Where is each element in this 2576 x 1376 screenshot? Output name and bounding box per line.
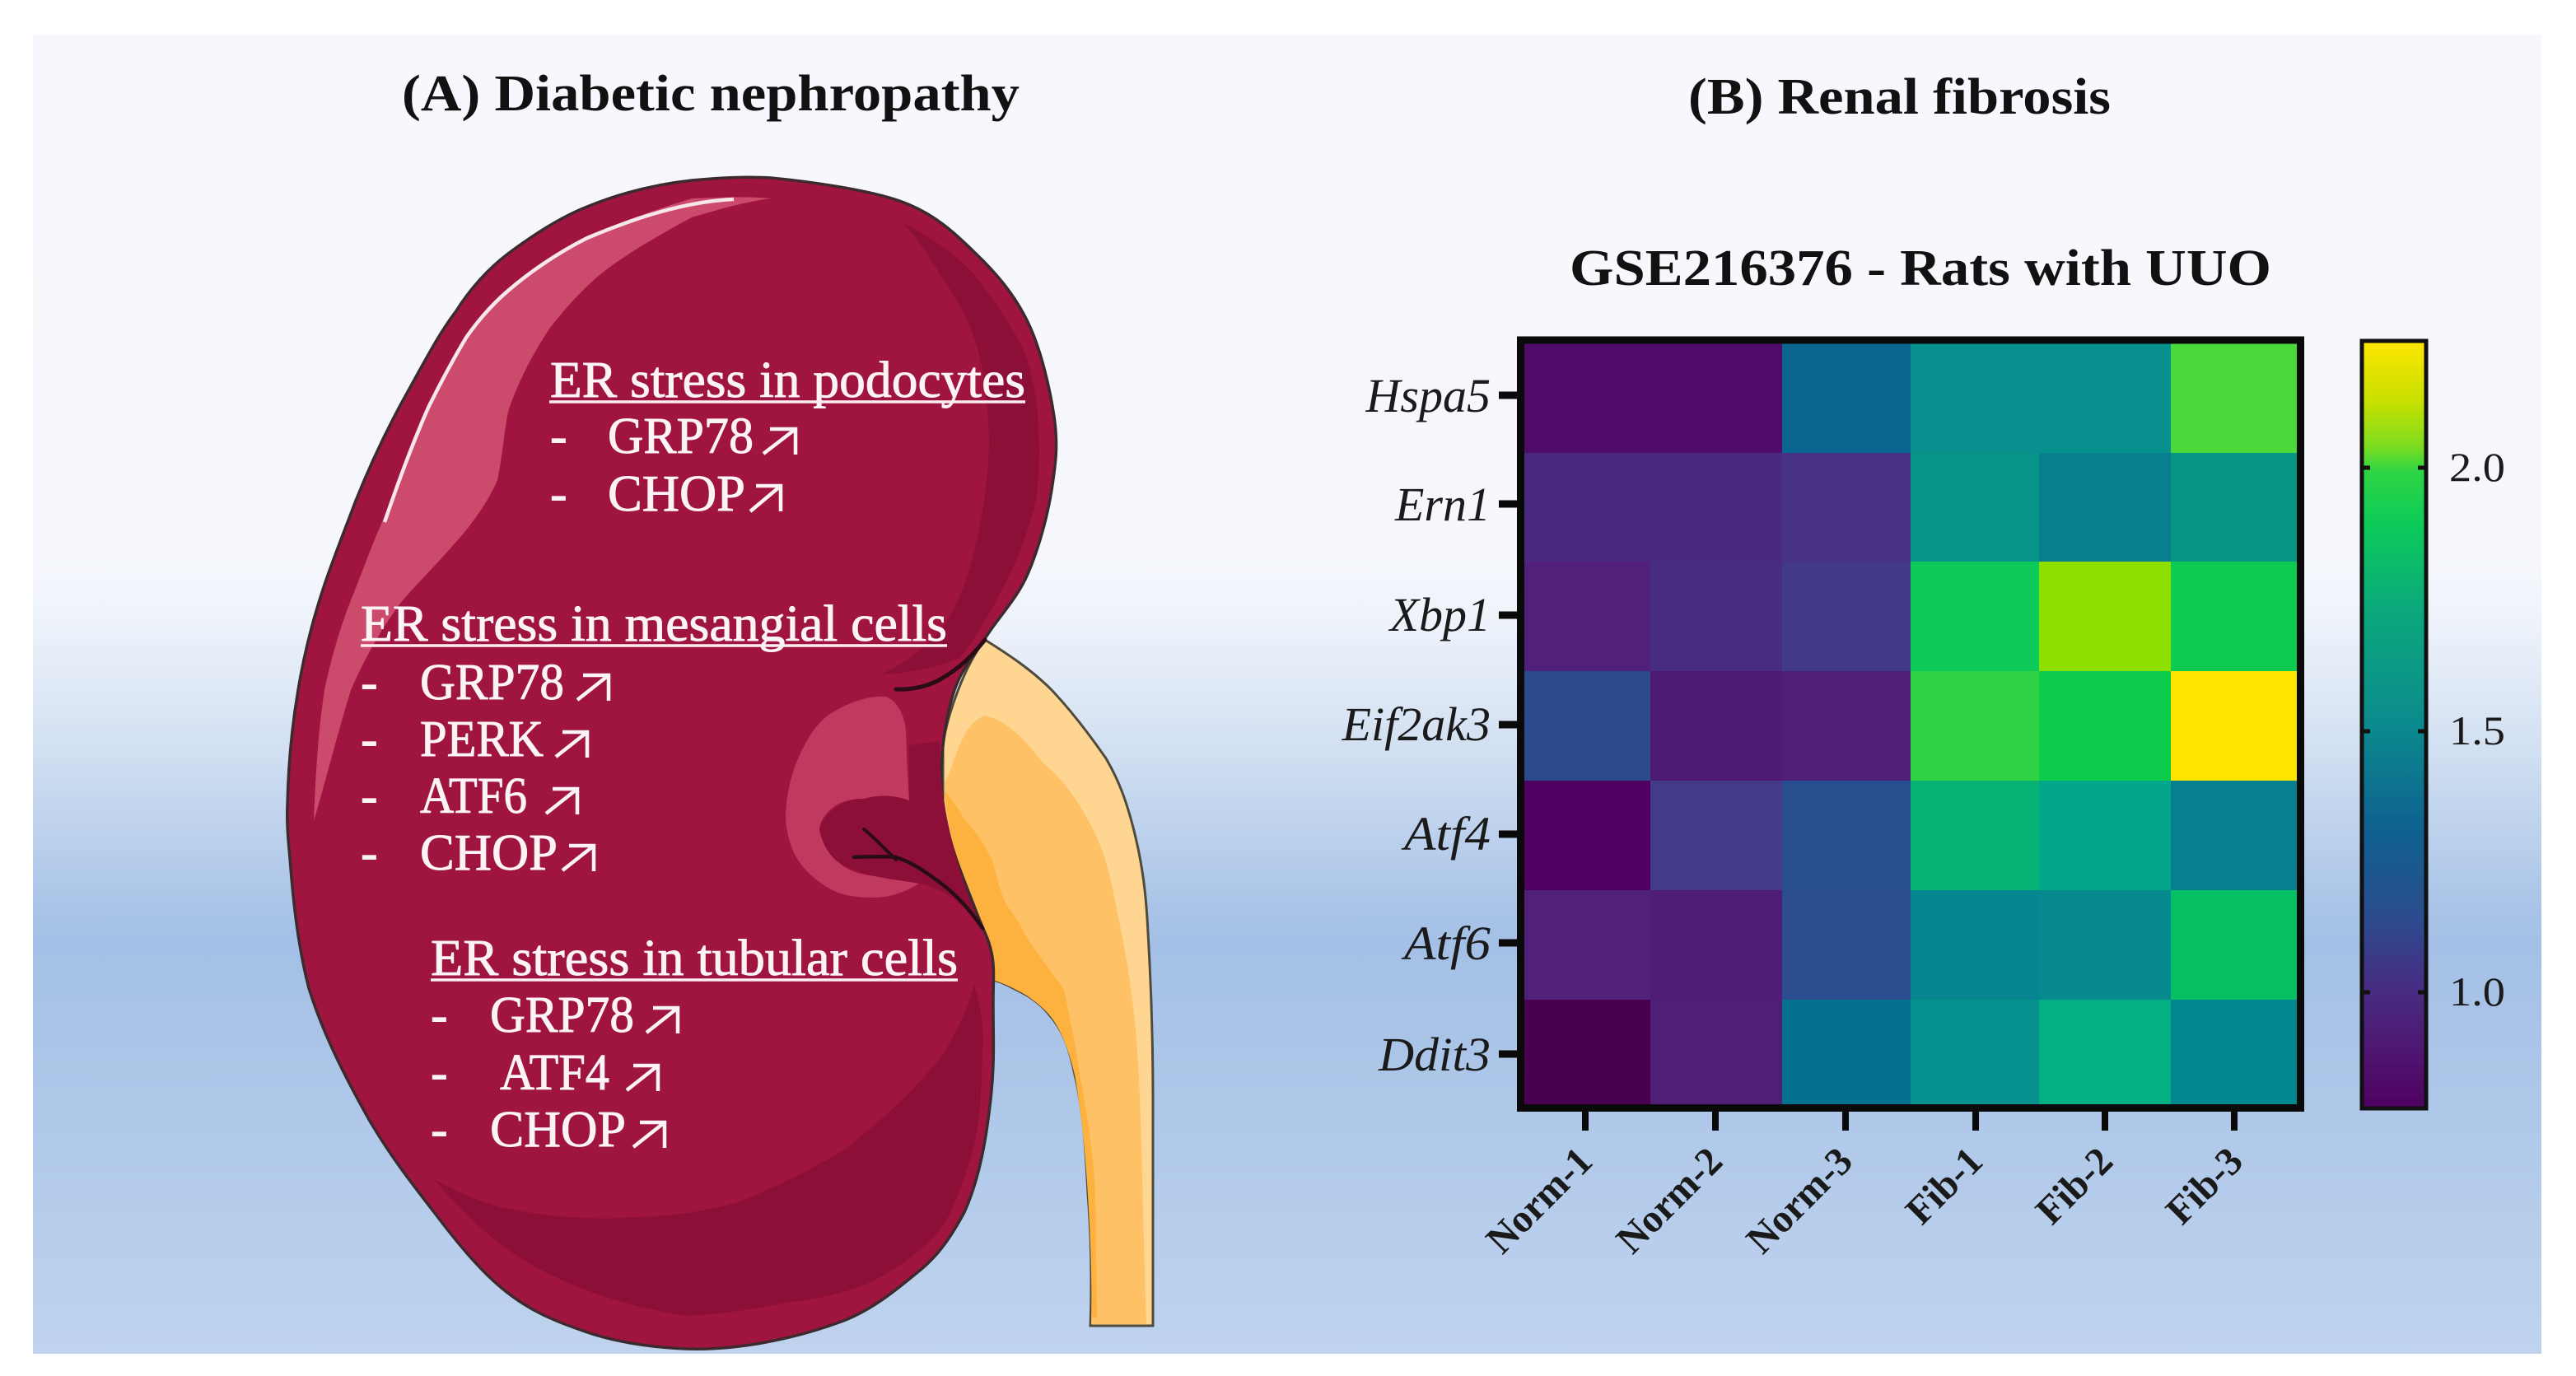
ureter: [943, 640, 1153, 1326]
y axis gene labels: Hspa5: [1365, 369, 1491, 422]
y axis gene labels: Atf6: [1401, 917, 1491, 970]
text block: tubular cells: ER stress in tubular cells: [431, 931, 958, 987]
panel B: renal fibrosis: [1342, 69, 2505, 1262]
x axis sample labels: Norm-1: [1478, 1139, 1601, 1262]
kidney body: [287, 177, 1057, 1349]
text block: mesangial cells: -: [361, 655, 378, 711]
kidney highlight: [314, 197, 771, 821]
renal pelvis: [786, 697, 919, 898]
y axis gene labels: Xbp1: [1388, 588, 1491, 641]
text block: mesangial cells: -: [361, 711, 378, 767]
x axis sample labels: Norm-3: [1738, 1139, 1861, 1262]
text block: mesangial cells: CHOP: [420, 825, 558, 881]
text block: podocytes: -: [550, 408, 567, 464]
y axis gene labels: Atf4: [1401, 807, 1491, 861]
text block: mesangial cells: GRP78: [420, 655, 564, 711]
kidney shading: [434, 222, 1039, 1316]
colour scale bar: 1.5: [2449, 707, 2505, 753]
x axis sample labels: Fib-3: [2158, 1139, 2252, 1233]
y axis gene labels: Ern1: [1394, 478, 1491, 531]
text block: mesangial cells: PERK: [420, 711, 544, 767]
x axis sample labels: [1478, 1110, 2252, 1262]
x axis sample labels: Fib-1: [1897, 1139, 1991, 1233]
text block: podocytes: [549, 352, 1025, 522]
chart title: GSE216376 - Rats with UUO: [1570, 240, 2271, 296]
heading B: (B) Renal fibrosis: [1688, 69, 2111, 125]
kidney white gloss line: [385, 199, 734, 522]
heading A: (A) Diabetic nephropathy: [402, 66, 1020, 122]
text block: podocytes: GRP78: [608, 408, 754, 464]
text block: tubular cells: [431, 931, 958, 1158]
text block: tubular cells: GRP78: [490, 987, 634, 1043]
x axis sample labels: Norm-2: [1608, 1139, 1731, 1262]
text block: mesangial cells: ATF6: [420, 768, 527, 824]
y axis gene labels: Ddit3: [1378, 1028, 1491, 1081]
text block: podocytes: ER stress in podocytes: [550, 352, 1025, 408]
renal vessels: [854, 640, 985, 928]
text block: mesangial cells: ER stress in mesangial cells: [361, 596, 947, 652]
x axis sample labels: Fib-2: [2028, 1139, 2121, 1233]
heatmap: [1520, 340, 2301, 1108]
y axis gene labels: Eif2ak3: [1342, 697, 1491, 751]
text block: mesangial cells: -: [361, 768, 378, 824]
text block: mesangial cells: -: [361, 825, 378, 881]
y axis gene labels: [1342, 369, 1519, 1081]
text block: tubular cells: CHOP: [490, 1102, 626, 1158]
panel A: diabetic nephropathy: [287, 66, 1153, 1349]
colour scale bar: 2.0: [2449, 444, 2505, 490]
text block: podocytes: -: [550, 466, 567, 522]
colour scale bar: [2360, 341, 2505, 1108]
text block: tubular cells: ATF4: [500, 1045, 609, 1101]
text block: tubular cells: -: [431, 1102, 448, 1158]
text block: mesangial cells: [361, 596, 947, 881]
text block: tubular cells: -: [431, 1045, 448, 1101]
text block: tubular cells: -: [431, 987, 448, 1043]
colour scale bar: 1.0: [2449, 968, 2505, 1015]
text block: podocytes: CHOP: [608, 466, 745, 522]
